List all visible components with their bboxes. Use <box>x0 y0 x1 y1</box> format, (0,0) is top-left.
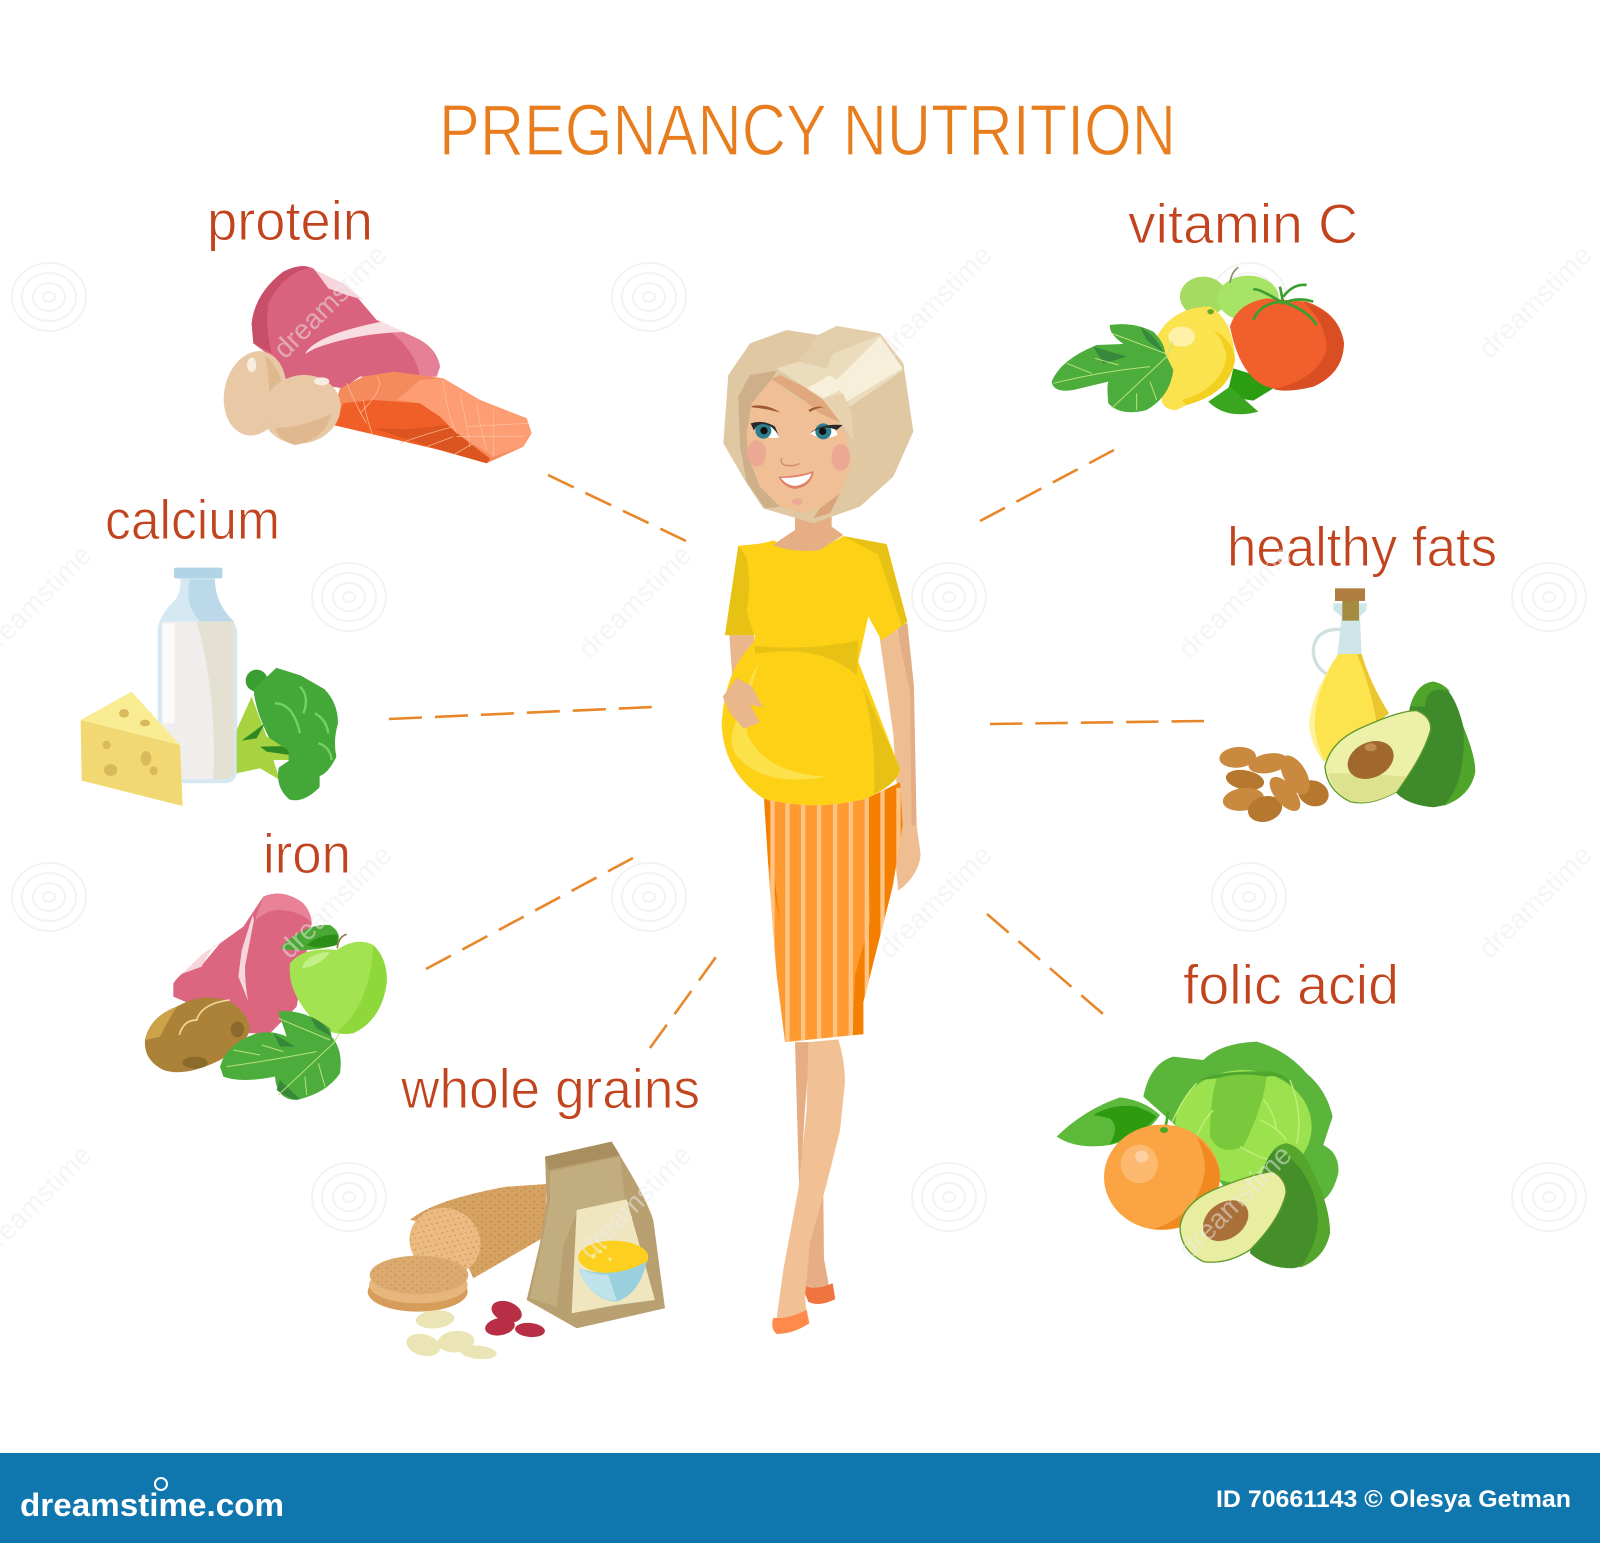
woman head <box>723 326 913 551</box>
panel: protein <box>207 189 532 463</box>
watermark text: dreamstime <box>272 839 398 964</box>
panel: folic acid <box>1057 953 1399 1268</box>
icon: apple, tomato, lemon and leaf <box>1052 267 1344 414</box>
icon: meat, eggs and salmon <box>216 266 532 463</box>
panel: calcium <box>81 488 337 806</box>
label: vitamin C: vitamin C <box>1128 192 1358 255</box>
connector: vitamin C <box>980 450 1114 521</box>
icon: milk, cheese and broccoli <box>81 568 337 806</box>
footer logo: dreamstime.com <box>20 1487 284 1523</box>
connector: protein <box>548 475 686 541</box>
connector: healthy fats <box>990 721 1204 724</box>
watermark text <box>0 239 1598 1264</box>
watermark text: dreamstime <box>872 839 998 964</box>
label: healthy fats: healthy fats <box>1227 515 1497 578</box>
icon: cabbage, orange and avocado <box>1057 1042 1338 1268</box>
label: iron: iron <box>263 822 351 885</box>
watermark text: dreamstime <box>1172 539 1298 664</box>
panel: iron <box>145 822 387 1100</box>
watermark text: dreamstime <box>572 539 698 664</box>
label: folic acid: folic acid <box>1183 953 1399 1016</box>
icon: meat, apple, potato and leaf <box>145 894 387 1100</box>
watermark text: dreamstime <box>1472 239 1598 364</box>
connector: folic acid <box>987 914 1103 1014</box>
icon: oil bottle, almonds and avocado <box>1219 588 1475 826</box>
icon: bread, flour bag and beans <box>368 1142 665 1361</box>
label: calcium: calcium <box>105 488 280 551</box>
watermark text: dreamstime <box>572 1139 698 1264</box>
connector: whole grains <box>650 957 716 1048</box>
panel: whole grains <box>368 1057 700 1361</box>
panel: vitamin C <box>1052 192 1358 414</box>
watermark text: dreamstime <box>267 239 393 364</box>
watermark text: dreamstime <box>1472 839 1598 964</box>
watermark text: dreamstime <box>1172 1139 1298 1264</box>
figure: pregnant woman <box>722 326 921 1334</box>
connector: calcium <box>389 707 653 719</box>
connector: iron <box>426 858 633 969</box>
watermark text: dreamstime <box>872 239 998 364</box>
woman body <box>722 536 921 1334</box>
footer bar <box>0 1453 1600 1543</box>
footer credit: ID 70661143 © Olesya Getman <box>1216 1486 1571 1513</box>
label: whole grains: whole grains <box>400 1057 700 1120</box>
label: protein: protein <box>207 189 373 252</box>
title: PREGNANCY NUTRITION <box>439 91 1176 171</box>
panel: healthy fats <box>1219 515 1497 826</box>
